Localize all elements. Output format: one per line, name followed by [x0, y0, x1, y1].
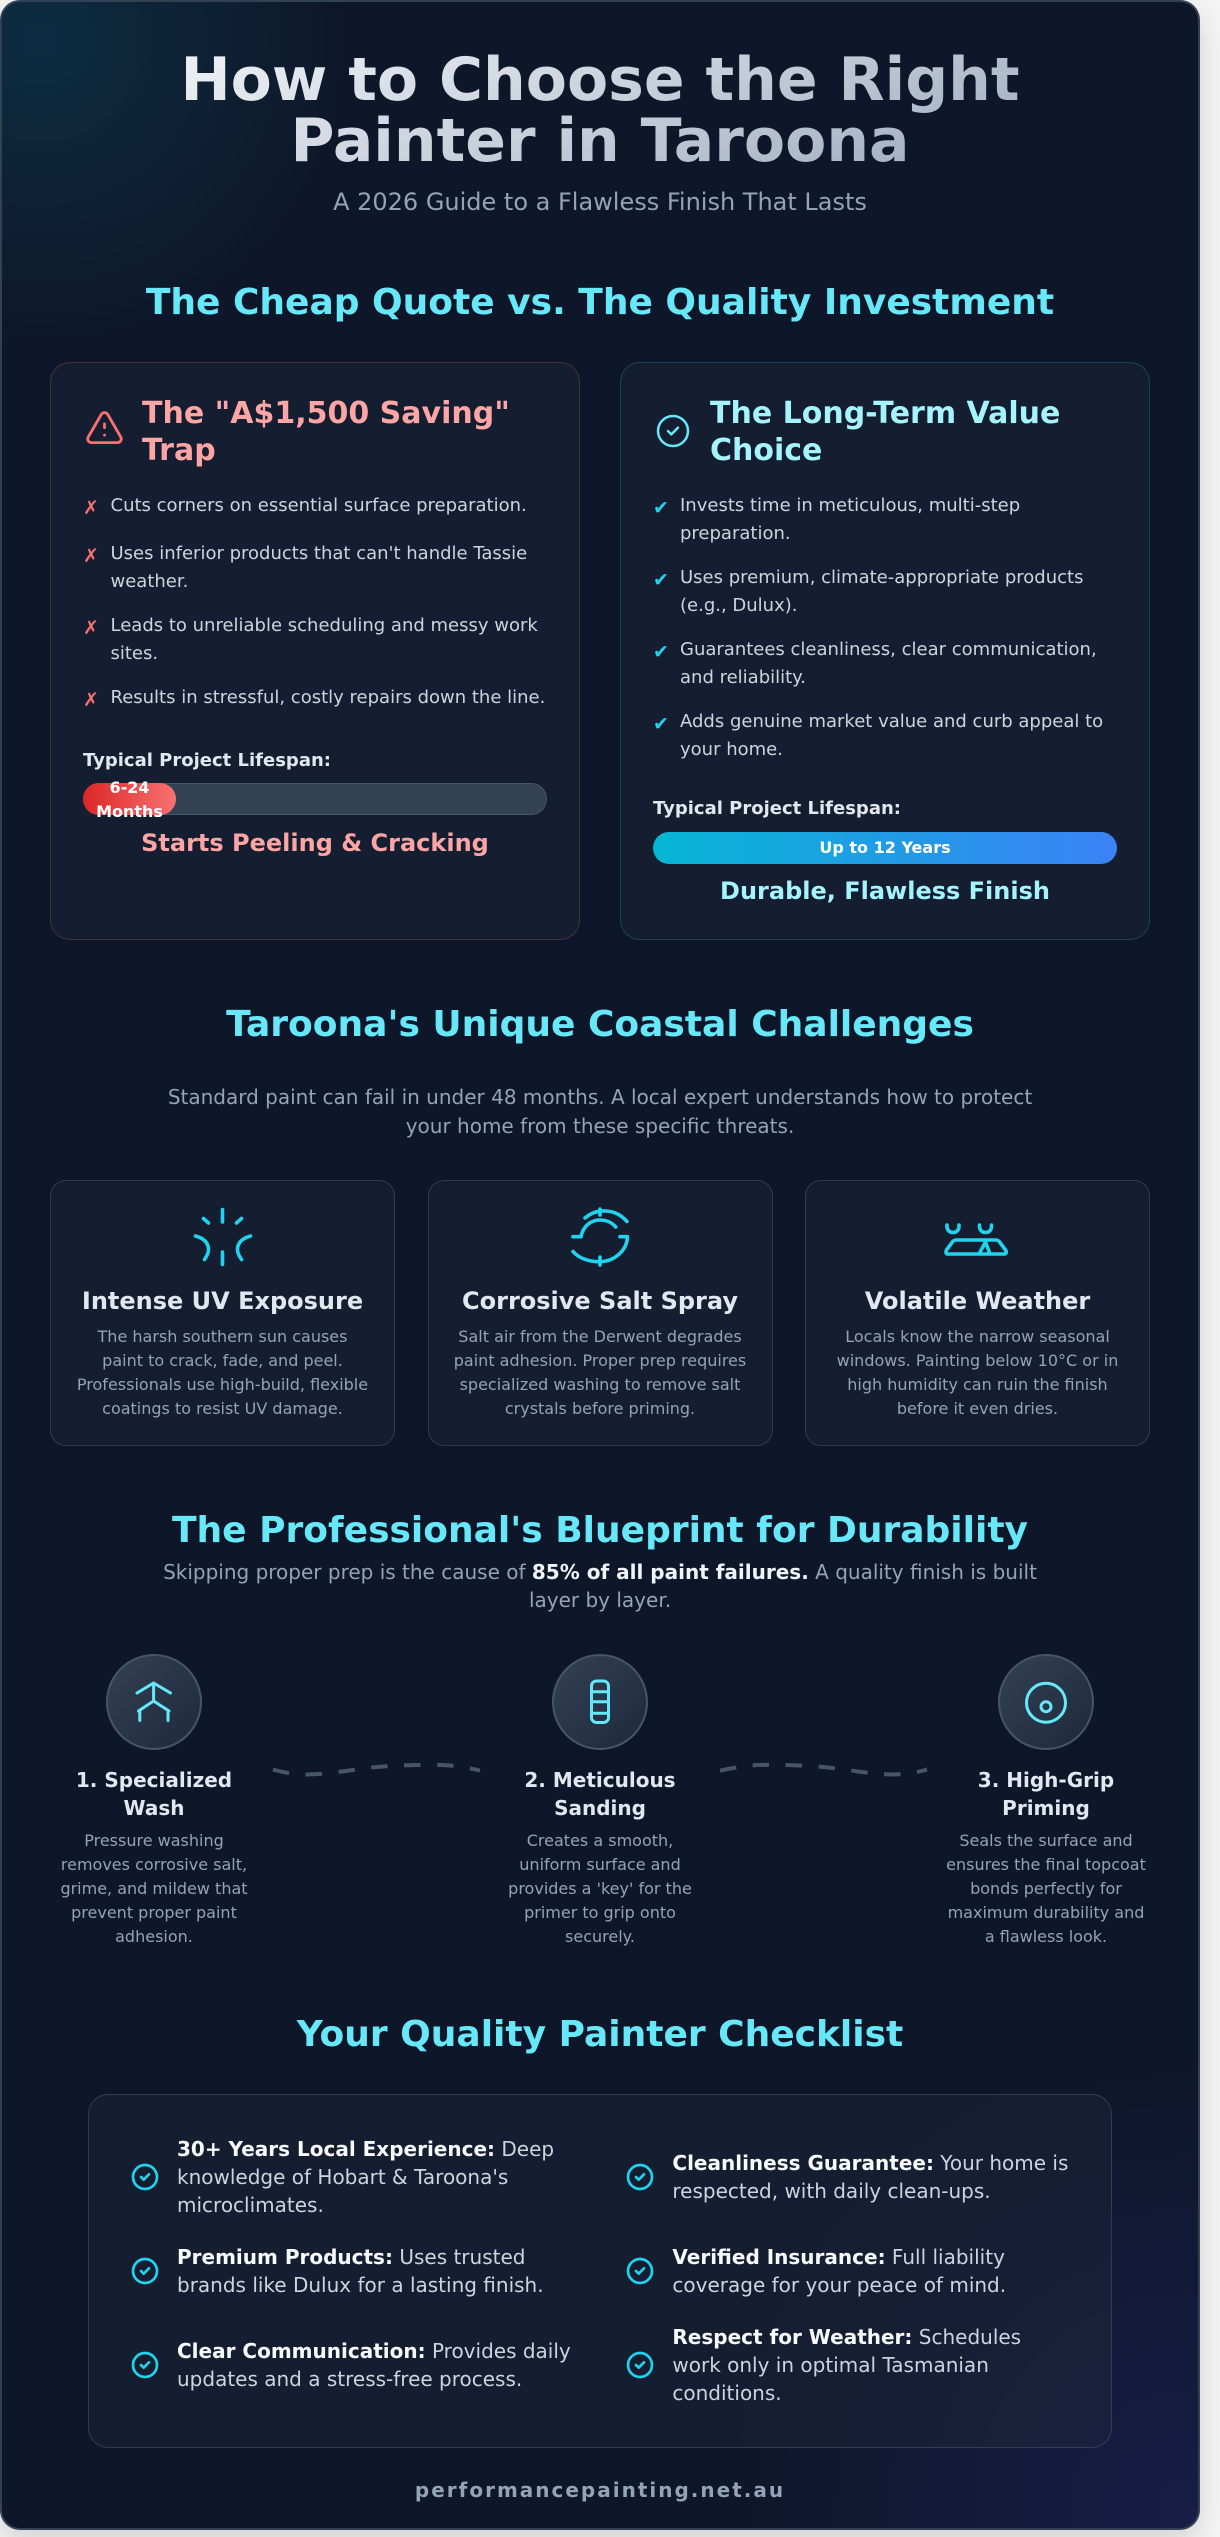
- icon: check circle: [656, 414, 690, 448]
- step 3 title: [978, 1768, 1114, 1820]
- cheap list: ✗: [83, 689, 99, 711]
- cheap lifespan label: Typical Project Lifespan:: [83, 750, 331, 771]
- panel: salt spray: [428, 1180, 772, 1446]
- icon: broken sun: [194, 1208, 252, 1266]
- step 3 title: 3. High-Grip: [978, 1768, 1114, 1792]
- step 3 description: [946, 1831, 1146, 1946]
- weather description: before it even dries.: [897, 1398, 1058, 1418]
- quality list: preparation.: [680, 523, 791, 544]
- step 1 description: [60, 1831, 248, 1946]
- checklist: weather respect: [672, 2325, 1021, 2405]
- step 1 description: prevent proper paint: [71, 1903, 237, 1922]
- salt description: crystals before priming.: [505, 1398, 695, 1418]
- subtitle: A 2026 Guide to a Flawless Finish That Lasts: [333, 188, 867, 216]
- salt description: [454, 1326, 746, 1418]
- checklist: weather respect: Respect for Weather: Schedules: [672, 2325, 1021, 2349]
- cheap list: weather.: [110, 571, 188, 592]
- cheap list: [83, 495, 545, 711]
- checklist: insurance: Verified Insurance: Full liability: [672, 2245, 1005, 2269]
- blueprint intro: Skipping proper prep is the cause of 85% of all paint failures. A quality finish is built: [163, 1560, 1037, 1584]
- checklist: insurance: [672, 2245, 1006, 2297]
- icon: weather drops and slabs: [944, 1223, 1008, 1256]
- title: [50, 50, 1150, 172]
- footer: performancepainting.net.au: [415, 2478, 785, 2502]
- checklist: weather respect: conditions.: [672, 2381, 782, 2405]
- quality list: [653, 495, 1103, 760]
- step 3 description: ensures the final topcoat: [946, 1855, 1146, 1874]
- step 2 description: [508, 1831, 692, 1946]
- cheap list: ✗: [83, 545, 99, 567]
- checklist: experience: [177, 2137, 554, 2217]
- quality lifespan label: Typical Project Lifespan:: [653, 798, 901, 819]
- step 3 title: Priming: [1002, 1796, 1090, 1820]
- quality list: Uses premium, climate-appropriate products: [680, 567, 1083, 588]
- icon: check 3: [132, 2352, 158, 2378]
- panel: volatile weather: [805, 1180, 1150, 1446]
- step 1 description: Pressure washing: [84, 1831, 224, 1850]
- blueprint intro: layer by layer.: [529, 1588, 671, 1612]
- cheap lifespan bar: Months: [96, 802, 163, 820]
- cheap list: Cuts corners on essential surface preparation.: [110, 495, 527, 516]
- checklist: cleanliness: respected, with daily clean-ups.: [672, 2179, 991, 2203]
- heading: checklist: Your Quality Painter Checklist: [297, 2014, 903, 2055]
- checklist: products: [177, 2245, 544, 2297]
- icon: step 1 wash: [106, 1654, 202, 1750]
- quality panel title: [710, 396, 1060, 468]
- step 1 description: grime, and mildew that: [60, 1879, 248, 1898]
- challenges intro: your home from these specific threats.: [406, 1114, 794, 1138]
- checklist: communication: [177, 2339, 571, 2391]
- cheap panel title: Trap: [142, 432, 216, 468]
- panel: quality value: [620, 362, 1150, 940]
- step 1 title: 1. Specialized: [76, 1768, 232, 1792]
- panel: checklist: [88, 2094, 1112, 2448]
- step 2 description: securely.: [565, 1927, 635, 1946]
- step 3 description: a flawless look.: [985, 1927, 1107, 1946]
- quality panel title: Choice: [710, 433, 822, 468]
- icon: salt spray cycle: [571, 1207, 630, 1267]
- checklist: products: Premium Products: Uses trusted: [177, 2245, 525, 2269]
- checklist: experience: 30+ Years Local Experience: Deep: [177, 2137, 554, 2161]
- heading: coastal challenges: Taroona's Unique Coastal Challenges: [226, 1004, 974, 1045]
- arrow: connector 1 to 2: [272, 1762, 480, 1776]
- panel: UV exposure: [50, 1180, 395, 1446]
- cheap panel title: [142, 396, 510, 468]
- weather description: [837, 1326, 1118, 1418]
- checklist: communication: Clear Communication: Provides daily: [177, 2339, 571, 2363]
- quality result: Durable, Flawless Finish: [720, 877, 1050, 905]
- quality list: ✔: [653, 713, 669, 735]
- heading: cheap quote vs quality: The Cheap Quote vs. The Quality Investment: [146, 282, 1054, 323]
- checklist: communication: updates and a stress-free process.: [177, 2367, 522, 2391]
- weather description: Locals know the narrow seasonal: [845, 1326, 1110, 1346]
- UV title: Intense UV Exposure: [82, 1287, 363, 1315]
- cheap list: ✗: [83, 497, 99, 519]
- quality panel title: The Long-Term Value: [710, 396, 1060, 431]
- UV description: Professionals use high-build, flexible: [77, 1374, 368, 1394]
- checklist: insurance: coverage for your peace of mind.: [672, 2273, 1006, 2297]
- quality list: Adds genuine market value and curb appeal to: [680, 711, 1103, 732]
- blueprint intro: [163, 1560, 1037, 1612]
- icon: check 6: [626, 2352, 654, 2378]
- quality list: your home.: [680, 739, 783, 760]
- title: Painter in Taroona: [290, 106, 910, 176]
- weather title: Volatile Weather: [865, 1287, 1090, 1315]
- step 2 description: primer to grip onto: [524, 1903, 676, 1922]
- quality lifespan bar: [653, 832, 1117, 864]
- cheap list: Results in stressful, costly repairs down the line.: [110, 687, 545, 708]
- quality list: Invests time in meticulous, multi-step: [680, 495, 1020, 516]
- quality list: ✔: [653, 569, 669, 591]
- step 3 description: bonds perfectly for: [970, 1879, 1122, 1898]
- step 1 description: adhesion.: [115, 1927, 193, 1946]
- step 2 description: Creates a smooth,: [527, 1831, 673, 1850]
- weather description: high humidity can ruin the finish: [847, 1374, 1108, 1394]
- cheap list: Leads to unreliable scheduling and messy work: [110, 615, 538, 636]
- quality list: ✔: [653, 497, 669, 519]
- salt title: Corrosive Salt Spray: [462, 1287, 738, 1315]
- salt description: specialized washing to remove salt: [460, 1374, 740, 1394]
- icon: step 3 priming: [998, 1654, 1094, 1750]
- UV description: The harsh southern sun causes: [98, 1326, 347, 1346]
- step 2 title: Sanding: [554, 1796, 646, 1820]
- checklist: weather respect: work only in optimal Tasmanian: [672, 2353, 989, 2377]
- checklist: experience: microclimates.: [177, 2193, 324, 2217]
- cheap result: Starts Peeling & Cracking: [141, 829, 489, 857]
- step 2 description: provides a 'key' for the: [508, 1879, 692, 1898]
- salt description: Salt air from the Derwent degrades: [458, 1326, 742, 1346]
- icon: check 2: [132, 2258, 158, 2284]
- quality list: (e.g., Dulux).: [680, 595, 797, 616]
- checklist: cleanliness: Cleanliness Guarantee: Your home is: [672, 2151, 1068, 2175]
- step 1 description: removes corrosive salt,: [61, 1855, 247, 1874]
- salt description: paint adhesion. Proper prep requires: [454, 1350, 746, 1370]
- weather description: windows. Painting below 10°C or in: [837, 1350, 1118, 1370]
- step 2 title: 2. Meticulous: [524, 1768, 676, 1792]
- quality list: and reliability.: [680, 667, 806, 688]
- quality list: ✔: [653, 641, 669, 663]
- step 1 title: Wash: [124, 1796, 184, 1820]
- cheap lifespan bar: [83, 783, 547, 815]
- UV description: paint to crack, fade, and peel.: [102, 1350, 343, 1370]
- icon: step 2 sanding: [552, 1654, 648, 1750]
- checklist: products: brands like Dulux for a lasting finish.: [177, 2273, 544, 2297]
- cheap list: Uses inferior products that can't handle Tassie: [110, 543, 527, 564]
- step 3 description: Seals the surface and: [959, 1831, 1133, 1850]
- icon: check 4: [626, 2164, 654, 2190]
- arrow: connector 2 to 3: [720, 1762, 928, 1776]
- checklist: experience: knowledge of Hobart & Taroona's: [177, 2165, 508, 2189]
- checklist: cleanliness: [672, 2151, 1068, 2203]
- heading: blueprint: The Professional's Blueprint for Durability: [172, 1510, 1028, 1551]
- step 2 title: [524, 1768, 676, 1820]
- cheap lifespan bar: 6-24: [109, 778, 150, 796]
- cheap panel title: The "A$1,500 Saving": [142, 396, 510, 430]
- icon: check 5: [626, 2258, 654, 2284]
- UV description: coatings to resist UV damage.: [102, 1398, 343, 1418]
- challenges intro: Standard paint can fail in under 48 months. A local expert understands how to protect: [168, 1085, 1032, 1109]
- quality lifespan bar: Up to 12 Years: [819, 838, 951, 856]
- cheap list: ✗: [83, 617, 99, 639]
- challenges intro: [168, 1085, 1032, 1138]
- step 2 description: uniform surface and: [519, 1855, 681, 1874]
- UV description: [77, 1326, 368, 1418]
- step 3 description: maximum durability and: [948, 1903, 1144, 1922]
- panel: cheap quote trap: [50, 362, 580, 940]
- icon: check 1: [132, 2164, 158, 2190]
- title: How to Choose the Right: [180, 45, 1020, 115]
- step 1 title: [76, 1768, 232, 1820]
- quality list: Guarantees cleanliness, clear communication,: [680, 639, 1097, 660]
- icon: warning triangle: [86, 411, 123, 444]
- cheap list: sites.: [110, 643, 158, 664]
